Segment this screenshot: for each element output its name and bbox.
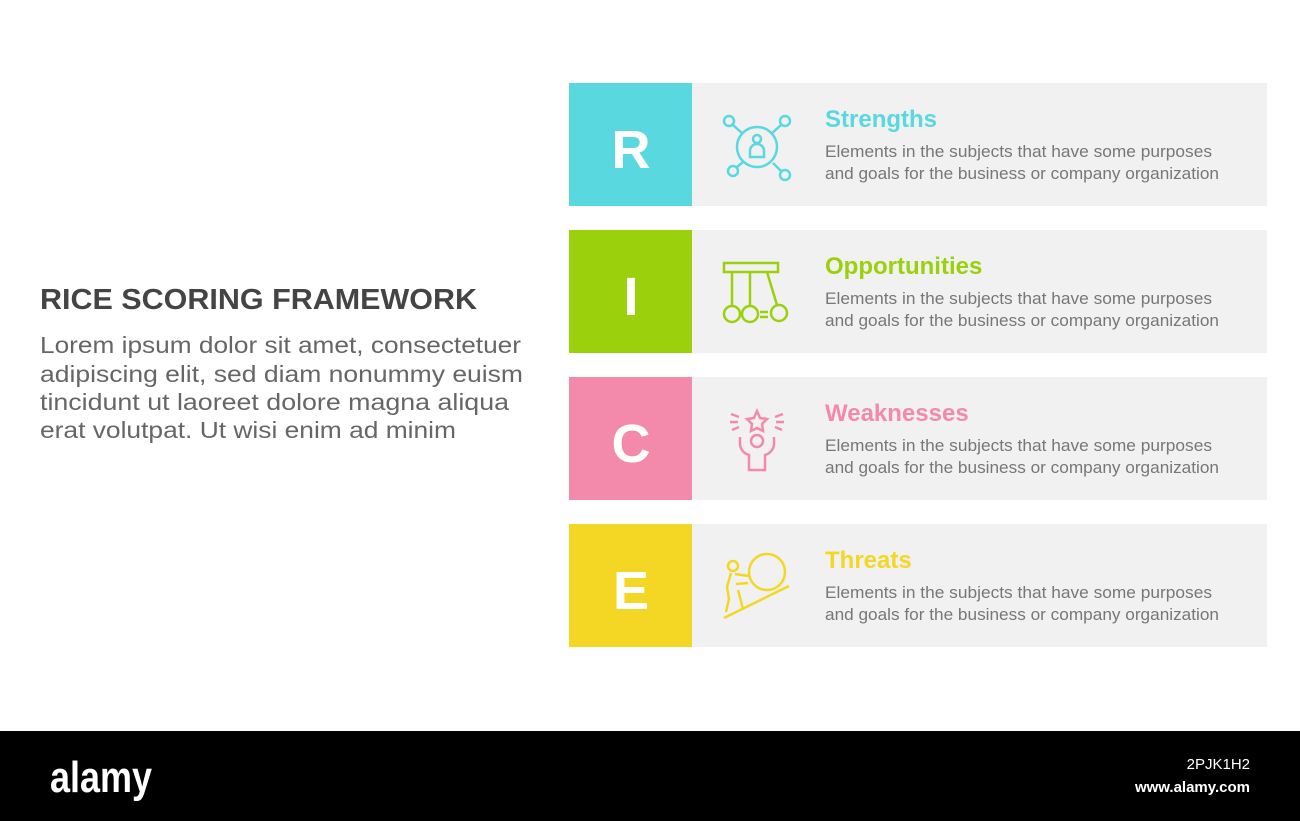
icon: network person <box>724 116 790 180</box>
footer band: alamy <box>50 753 152 802</box>
row: I opportunities: Elements in the subjects that have some purposes <box>825 289 1212 308</box>
footer band: 2PJK1H2 <box>1187 756 1250 773</box>
row: C weaknesses <box>569 377 1267 500</box>
row: C weaknesses: C <box>612 414 650 474</box>
row: R strengths: R <box>612 120 650 180</box>
icon: newton cradle <box>724 263 787 322</box>
footer band: www.alamy.com <box>1134 779 1250 796</box>
title: RICE SCORING FRAMEWORK <box>40 284 477 316</box>
description paragraph: tincidunt ut laoreet dolore magna aliqua <box>40 389 509 415</box>
description paragraph <box>40 332 523 443</box>
row: I opportunities: Opportunities <box>825 253 982 280</box>
row: E threats: E <box>613 561 649 621</box>
row: R strengths: Elements in the subjects that have some purposes <box>825 142 1212 161</box>
description paragraph: adipiscing elit, sed diam nonummy euism <box>40 361 523 387</box>
row: C weaknesses: Weaknesses <box>825 400 969 427</box>
row: I opportunities: I <box>623 267 639 327</box>
row: C weaknesses: and goals for the business or company organization <box>825 458 1219 477</box>
description paragraph: erat volutpat. Ut wisi enim ad minim <box>40 417 456 443</box>
description paragraph: Lorem ipsum dolor sit amet, consectetuer <box>40 332 521 358</box>
row: C weaknesses: Elements in the subjects that have some purposes <box>825 436 1212 455</box>
icon: pushing boulder <box>724 554 789 618</box>
row: R strengths: Strengths <box>825 106 937 133</box>
row: E threats: Elements in the subjects that have some purposes <box>825 583 1212 602</box>
row: E threats <box>569 524 1267 647</box>
row: I opportunities <box>569 230 1267 353</box>
row: R strengths <box>569 83 1267 206</box>
row: I opportunities: and goals for the business or company organization <box>825 311 1219 330</box>
row: E threats: Threats <box>825 547 912 574</box>
row: E threats: and goals for the business or company organization <box>825 605 1219 624</box>
icon: person with star <box>730 411 784 470</box>
row: R strengths: and goals for the business or company organization <box>825 164 1219 183</box>
footer band <box>0 731 1300 821</box>
